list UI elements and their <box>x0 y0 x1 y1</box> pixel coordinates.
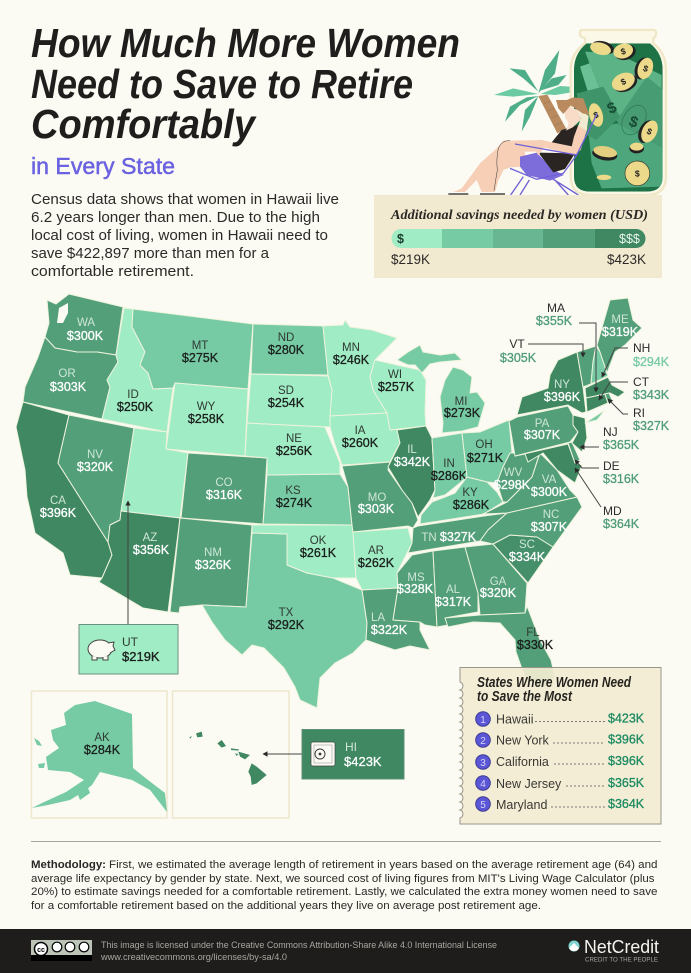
state: Idaho: $250K <box>117 400 154 414</box>
callout: MD: MD <box>603 504 622 518</box>
state: Maine: ME <box>611 314 629 326</box>
rank 3 California <box>476 754 645 769</box>
state: Virginia: $300K <box>531 485 568 499</box>
state: Virginia: VA <box>542 474 557 486</box>
state: Virginia <box>483 453 577 514</box>
state: Louisiana <box>362 588 430 650</box>
rank 1 Hawaii: $423K <box>608 712 645 726</box>
state: South Carolina: $334K <box>509 550 546 564</box>
state: Indiana <box>431 433 468 502</box>
state: California: CA <box>50 495 66 507</box>
state: South Dakota <box>247 374 332 427</box>
state: Washington: WA <box>77 317 95 329</box>
rank 1 Hawaii <box>476 712 645 726</box>
state: Washington: $300K <box>67 329 104 343</box>
callout: NJ: $365K <box>603 438 640 452</box>
inset: Alaska: $284K <box>84 743 121 757</box>
state: Iowa: IA <box>355 425 366 437</box>
callout: MA: MA <box>547 301 565 315</box>
state: Kentucky: $286K <box>453 498 490 512</box>
legend colour scale: $ <box>397 232 404 246</box>
rank 5 Maryland <box>476 797 645 812</box>
state: Michigan: MI <box>455 396 467 408</box>
callout: NH: $294K <box>633 355 670 369</box>
state: Connecticut <box>586 394 608 412</box>
rank 4 New Jersey: 4 <box>480 779 486 790</box>
state: Minnesota: $246K <box>333 353 370 367</box>
state: Alabama: AL <box>446 584 461 596</box>
state: Florida: FL <box>526 627 540 639</box>
rank 1 Hawaii: 1 <box>480 715 486 726</box>
state: Illinois: IL <box>407 444 417 456</box>
state: Michigan <box>397 345 485 433</box>
coins: $ <box>635 169 640 179</box>
state: Indiana: IN <box>443 458 455 470</box>
state: Idaho <box>102 308 173 432</box>
state: Tennessee <box>408 513 507 553</box>
callout: UT box: $219K <box>122 649 160 664</box>
callout: DE <box>575 459 640 486</box>
callout: VT: $305K <box>500 351 537 365</box>
callout: MA: $355K <box>536 314 573 328</box>
state: Texas: TX <box>279 607 294 619</box>
state: New York: $396K <box>544 390 581 404</box>
rank 3 California: 3 <box>480 758 486 769</box>
state: Alabama: $317K <box>435 595 472 609</box>
panel heading: States Where Women Need <box>477 675 632 691</box>
state: Mississippi: MS <box>407 572 425 584</box>
woman <box>448 97 597 195</box>
icon: piggy bank <box>88 640 115 660</box>
callout: MD <box>575 468 640 531</box>
state: New Jersey <box>572 415 587 452</box>
state: Wisconsin: $257K <box>378 380 415 394</box>
state: North Dakota: $280K <box>268 343 305 357</box>
NetCredit logo: CREDIT TO THE PEOPLE <box>585 958 658 964</box>
state: Oklahoma: OK <box>310 535 327 547</box>
callout: RI: RI <box>633 406 645 420</box>
state: Tennessee: TN <box>421 532 437 544</box>
state: Washington <box>45 294 123 355</box>
state: Illinois <box>388 426 435 517</box>
coins <box>586 38 661 186</box>
coins: $ <box>592 110 600 120</box>
state: Louisiana: LA <box>371 612 385 624</box>
state: North Dakota <box>251 324 328 375</box>
callout: RI: $327K <box>633 419 670 433</box>
callout: NH: NH <box>633 341 650 355</box>
state: Ohio <box>462 420 512 483</box>
rank 5 Maryland: $364K <box>608 797 645 811</box>
state: Arizona <box>99 511 180 612</box>
callout: CT <box>599 375 670 402</box>
rank 2 New York <box>476 732 645 748</box>
callout: HI box: $423K <box>344 754 382 769</box>
state: Montana: MT <box>192 340 208 352</box>
state: Maine: $319K <box>602 325 639 339</box>
state: Montana <box>132 309 253 389</box>
callout: HI box <box>302 730 404 779</box>
state: New Hampshire <box>591 346 608 384</box>
license text <box>100 940 497 963</box>
methodology text: average life expectancy by gender by state. Next, we sourced cost of living figures from MIT's Living Wage Calculator (plus <box>31 873 655 885</box>
intro text block: local cost of living, women in Hawaii need to <box>31 227 328 244</box>
state: Louisiana: $322K <box>371 623 408 637</box>
state: New Mexico <box>170 518 252 613</box>
coins: $ <box>642 63 650 74</box>
callout: CT: $343K <box>633 388 670 402</box>
state: Idaho: ID <box>127 389 139 401</box>
state: Nevada <box>58 415 134 542</box>
state: West Virginia <box>494 452 540 502</box>
callout: CT: CT <box>633 375 650 389</box>
illustration: woman in chair, palm tree and savings jar <box>448 30 667 197</box>
state: Nebraska <box>245 423 340 475</box>
state: Oregon <box>23 337 118 419</box>
title: How Much More Women <box>31 20 460 66</box>
rank 5 Maryland: 5 <box>480 800 486 811</box>
state: Pennsylvania: $307K <box>524 428 561 442</box>
rank 4 New Jersey: $365K <box>608 776 645 790</box>
legend colour scale: $$$ <box>619 232 640 246</box>
state: Rhode Island <box>605 393 613 403</box>
state: Nevada: $320K <box>77 460 114 474</box>
state: Pennsylvania: PA <box>535 418 550 430</box>
rank 2 New York: New York <box>496 734 550 748</box>
state: Iowa <box>330 413 400 465</box>
state: Oregon: $303K <box>50 380 87 394</box>
state: West Virginia: $298K <box>494 478 531 492</box>
legend panel <box>374 195 662 278</box>
state: Ohio: OH <box>475 439 493 451</box>
icon: Creative Commons badge <box>31 940 92 961</box>
intro text block: Census data shows that women in Hawaii live <box>31 191 339 208</box>
icon: Creative Commons badge: cc <box>37 947 45 954</box>
legend maximum: $423K <box>607 252 646 267</box>
methodology text: 20%) to estimate savings needed for a comfortable retirement. Lastly, we calculated the extra money women need to save <box>31 886 658 898</box>
callout: UT box <box>79 624 178 674</box>
state: Illinois: $342K <box>394 455 431 469</box>
state: South Dakota: $254K <box>268 396 305 410</box>
state: Nevada: NV <box>87 449 103 461</box>
state: Maryland <box>515 444 582 483</box>
state: North Carolina: $307K <box>531 520 568 534</box>
state: North Carolina <box>480 497 582 547</box>
state: South Carolina <box>493 535 553 583</box>
state: Pennsylvania <box>509 406 578 456</box>
NetCredit logo: NetCredit <box>584 937 659 957</box>
intro text block <box>31 191 339 280</box>
state: Georgia: $320K <box>480 586 517 600</box>
state: Minnesota <box>323 320 397 416</box>
intro text block: save $422,897 more than men for a <box>31 245 270 262</box>
rank 3 California: California <box>496 755 549 769</box>
license text: www.creativecommons.org/licenses/by-sa/4.0 <box>100 952 287 963</box>
coins: $ <box>619 76 628 87</box>
panel: top five states <box>460 668 661 824</box>
state: Oregon: OR <box>58 368 76 380</box>
state: Minnesota: MN <box>342 342 360 354</box>
state: New York: NY <box>554 379 570 391</box>
state: Tennessee: $327K <box>440 530 477 544</box>
state: Kentucky: KY <box>462 487 478 499</box>
rank 4 New Jersey: New Jersey <box>496 777 562 791</box>
coins: $ <box>620 46 627 57</box>
state: Oklahoma <box>252 525 356 578</box>
coins: $ <box>645 126 654 137</box>
state: Nebraska: NE <box>286 433 302 445</box>
panel heading <box>477 675 632 705</box>
subtitle: in Every State <box>31 153 175 179</box>
state: Arkansas <box>353 528 412 590</box>
arrow: Utah callout <box>127 501 129 624</box>
state: Wyoming: WY <box>197 401 216 413</box>
title: Need to Save to Retire <box>31 61 413 107</box>
state: Missouri: MO <box>368 492 386 504</box>
callout: HI box: HI <box>345 740 357 754</box>
icon: safe <box>311 742 335 766</box>
state: Montana: $275K <box>182 351 219 365</box>
license text: This image is licensed under the Creative Commons Attribution-Share Alike 4.0 International License <box>101 940 497 951</box>
state: California: $396K <box>40 506 77 520</box>
rank 3 California: $396K <box>608 754 645 768</box>
state: Texas: $292K <box>268 618 305 632</box>
state: Colorado <box>181 453 267 524</box>
state: Colorado: $316K <box>206 488 243 502</box>
palm tree <box>494 50 570 133</box>
callout: NH <box>602 341 670 377</box>
state: Wisconsin: WI <box>388 369 402 381</box>
callout: MD: $364K <box>603 517 640 531</box>
callout: VT: VT <box>509 337 525 351</box>
state: Missouri: $303K <box>358 502 395 516</box>
legend minimum: $219K <box>391 252 430 267</box>
state: Oklahoma: $261K <box>300 546 337 560</box>
state: Michigan: $273K <box>444 406 481 420</box>
jar <box>570 30 667 197</box>
callout: MA <box>536 301 596 392</box>
state: Kansas: $274K <box>276 496 313 510</box>
state: North Carolina: NC <box>543 509 559 521</box>
callout: RI <box>608 399 670 433</box>
state: Indiana: $286K <box>431 469 468 483</box>
callout: NJ <box>580 425 640 452</box>
methodology text: for a comfortable retirement based on the additional years they live on average post retirement age. <box>31 900 541 912</box>
rank 5 Maryland: Maryland <box>496 798 547 812</box>
state: New Mexico: $326K <box>195 558 232 572</box>
state: Arizona: $356K <box>133 543 170 557</box>
state: Kentucky <box>420 477 503 524</box>
title: Comfortably <box>31 101 257 147</box>
legend colour scale <box>392 229 646 248</box>
methodology text: Methodology: <box>31 859 106 871</box>
state: Ohio: $271K <box>467 451 504 465</box>
state: Georgia <box>465 544 527 615</box>
state: Arizona: AZ <box>143 532 157 544</box>
arrow: Hawaii callout <box>263 753 302 755</box>
inset: Hawaii <box>172 691 289 818</box>
state: Maine <box>597 298 642 373</box>
callout: VT <box>500 337 583 365</box>
state: Georgia: GA <box>490 576 507 588</box>
state: Kansas: KS <box>285 485 301 497</box>
state: Florida <box>445 606 555 688</box>
state: Wyoming <box>166 383 248 456</box>
state: Florida: $330K <box>517 638 554 652</box>
inset: Alaska: AK <box>94 732 110 744</box>
state: Nebraska: $256K <box>276 444 313 458</box>
methodology text: First, we estimated the average length of retirement in years based on the average retirement age (64) and <box>109 859 658 871</box>
callout: DE: $316K <box>603 472 640 486</box>
state: Arkansas: $262K <box>358 556 395 570</box>
footer <box>0 929 691 973</box>
state: Wyoming: $258K <box>188 412 225 426</box>
state: Colorado: CO <box>215 477 233 489</box>
rank 1 Hawaii: Hawaii <box>496 712 534 726</box>
title <box>31 20 460 147</box>
callout: DE: DE <box>603 459 620 473</box>
callout: NJ: NJ <box>603 425 618 439</box>
state: Massachusetts <box>585 377 625 398</box>
state: Vermont <box>577 346 596 387</box>
callout: UT box: UT <box>122 635 139 649</box>
state: Utah <box>121 428 188 518</box>
state: North Dakota: ND <box>278 332 294 344</box>
state: West Virginia: WV <box>504 467 523 479</box>
state: South Dakota: SD <box>278 385 294 397</box>
rank 4 New Jersey <box>476 776 645 791</box>
state: Texas <box>202 533 367 708</box>
legend title: Additional savings needed by women (USD) <box>390 208 648 223</box>
state: Arkansas: AR <box>368 545 384 557</box>
state: Wisconsin <box>370 360 426 430</box>
state: Alabama <box>433 547 478 627</box>
state: Mississippi <box>393 551 437 627</box>
state: California <box>16 402 112 578</box>
state: South Carolina: SC <box>519 539 535 551</box>
state: New York <box>517 352 605 423</box>
state: Missouri <box>342 462 418 532</box>
rank 2 New York: $396K <box>608 732 645 746</box>
jar: $ <box>627 113 641 132</box>
state: New Mexico: NM <box>204 547 222 559</box>
rank 2 New York: 2 <box>480 736 486 747</box>
NetCredit logo <box>568 937 659 964</box>
intro text block: 6.2 years longer than men. Due to the high <box>31 209 320 226</box>
state: Delaware <box>568 442 580 463</box>
methodology text <box>31 859 658 912</box>
state: Kansas <box>263 474 352 525</box>
state: Iowa: $260K <box>342 436 379 450</box>
jar: $ <box>605 99 620 118</box>
state: Mississippi: $328K <box>397 582 434 596</box>
intro text block: comfortable retirement. <box>31 263 194 280</box>
inset: Alaska <box>32 691 167 818</box>
panel heading: to Save the Most <box>477 689 573 705</box>
